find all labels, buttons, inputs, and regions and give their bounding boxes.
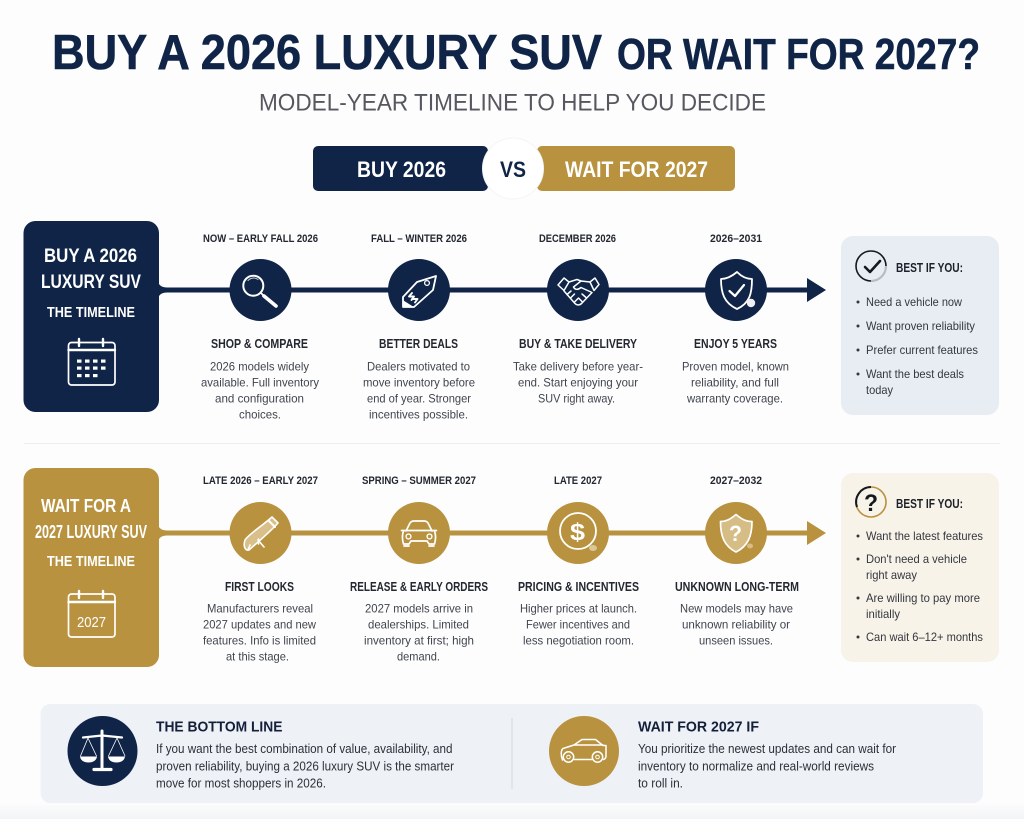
step: release and early orders: demand. bbox=[397, 650, 440, 664]
vs badge bbox=[482, 138, 544, 199]
arrow: buy timeline bbox=[160, 278, 826, 302]
step: pricing and incentives bbox=[518, 475, 639, 648]
versus banner bbox=[313, 138, 735, 199]
step: unknown long-term: New models may have bbox=[680, 602, 793, 616]
panel: buy timeline header: LUXURY SUV bbox=[41, 272, 141, 293]
step: first looks: features. Info is limited bbox=[203, 634, 316, 648]
step: release and early orders bbox=[350, 475, 488, 664]
subtitle: MODEL-YEAR TIMELINE TO HELP YOU DECIDE bbox=[259, 90, 766, 116]
step: shop and compare: available. Full inventory bbox=[201, 376, 319, 390]
step: enjoy 5 years: 2026–2031 bbox=[710, 233, 762, 245]
step: shop and compare: and configuration bbox=[215, 392, 304, 406]
panel: best if you buy bbox=[841, 236, 999, 415]
step: shop and compare: 2026 models widely bbox=[210, 360, 309, 374]
step: release and early orders: 2027 models arrive in bbox=[365, 602, 473, 616]
panel: best if you wait: Want the latest features bbox=[866, 529, 983, 543]
panel: best if you wait: right away bbox=[866, 568, 917, 582]
panel: best if you wait: initially bbox=[866, 607, 900, 621]
step: first looks: LATE 2026 – EARLY 2027 bbox=[203, 475, 318, 487]
icon: calendar bbox=[68, 339, 115, 385]
step: release and early orders: SPRING – SUMMER 2027 bbox=[362, 475, 476, 487]
text: the bottom line bbox=[156, 718, 455, 790]
panel: wait timeline header: 2027 LUXURY SUV bbox=[35, 522, 147, 542]
text: wait for 2027 if bbox=[638, 718, 897, 790]
step: pricing and incentives: Fewer incentives and bbox=[526, 618, 630, 632]
icon: check badge bbox=[856, 251, 886, 281]
arrow: wait timeline bbox=[160, 521, 826, 545]
step: buy and take delivery bbox=[513, 233, 643, 406]
step: first looks: at this stage. bbox=[226, 650, 289, 664]
text: the bottom line: move for most shoppers in 2026. bbox=[156, 776, 326, 790]
icon: calendar 2027: 2027 bbox=[77, 614, 106, 631]
step: enjoy 5 years: reliability, and full bbox=[691, 376, 779, 390]
step: pricing and incentives: less negotiation room. bbox=[523, 634, 634, 648]
step: buy and take delivery: DECEMBER 2026 bbox=[539, 233, 616, 245]
icon: shield question: ? bbox=[729, 521, 742, 546]
icon: dollar coin bbox=[547, 502, 609, 564]
step: better deals: end of year. Stronger bbox=[367, 392, 471, 406]
icon: telescope bbox=[230, 502, 292, 564]
step: first looks: Manufacturers reveal bbox=[207, 602, 313, 616]
step: enjoy 5 years: warranty coverage. bbox=[686, 392, 783, 406]
icon: magnifier bbox=[230, 259, 292, 321]
step: buy and take delivery: SUV right away. bbox=[538, 392, 615, 406]
panel: buy timeline header: BUY A 2026 bbox=[44, 246, 137, 267]
step: shop and compare: NOW – EARLY FALL 2026 bbox=[203, 233, 318, 245]
text: the bottom line: proven reliability, buying a 2026 luxury SUV is the smarter bbox=[156, 758, 455, 774]
step: buy and take delivery: BUY & TAKE DELIVERY bbox=[519, 337, 638, 351]
step: better deals: move inventory before bbox=[363, 376, 475, 390]
step: better deals: FALL – WINTER 2026 bbox=[371, 233, 467, 245]
icon: price tag bbox=[388, 259, 450, 321]
step: release and early orders: inventory at first; high bbox=[364, 634, 474, 648]
panel: bottom line bbox=[40, 704, 983, 803]
text: the bottom line: THE BOTTOM LINE bbox=[156, 718, 282, 736]
pill: wait for 2027: WAIT FOR 2027 bbox=[565, 157, 708, 182]
text: wait for 2027 if: inventory to normalize and real-world reviews bbox=[638, 758, 874, 774]
vs badge: VS bbox=[500, 157, 526, 182]
icon: handshake bbox=[547, 259, 609, 321]
step: shop and compare: SHOP & COMPARE bbox=[211, 337, 308, 351]
step: better deals bbox=[363, 233, 475, 422]
icon: shield question bbox=[705, 502, 767, 564]
step: better deals: BETTER DEALS bbox=[379, 337, 458, 351]
step: release and early orders: RELEASE & EARLY ORDERS bbox=[350, 580, 488, 594]
panel: best if you buy: Prefer current features bbox=[866, 343, 978, 357]
step: pricing and incentives: LATE 2027 bbox=[554, 475, 602, 487]
step: unknown long-term: UNKNOWN LONG-TERM bbox=[675, 580, 799, 594]
panel: best if you buy: today bbox=[866, 383, 893, 397]
panel: best if you buy: Want the best deals bbox=[866, 367, 964, 381]
step: unknown long-term: 2027–2032 bbox=[710, 475, 762, 487]
text: wait for 2027 if: to roll in. bbox=[638, 776, 683, 790]
step: better deals: incentives possible. bbox=[369, 408, 468, 422]
panel: wait timeline header bbox=[24, 468, 167, 667]
pill: wait for 2027 bbox=[537, 146, 735, 191]
pill: buy 2026 bbox=[313, 146, 488, 191]
title bbox=[52, 25, 980, 80]
step: pricing and incentives: PRICING & INCENTIVES bbox=[518, 580, 639, 594]
icon: calendar 2027 bbox=[68, 591, 115, 637]
panel: best if you wait: Can wait 6–12+ months bbox=[866, 630, 983, 644]
step: pricing and incentives: Higher prices at launch. bbox=[520, 602, 637, 616]
panel: best if you wait bbox=[841, 473, 999, 662]
panel: best if you wait: BEST IF YOU: bbox=[896, 496, 963, 511]
text: the bottom line: If you want the best combination of value, availability, and bbox=[156, 741, 452, 756]
title: BUY A 2026 LUXURY SUV bbox=[52, 25, 602, 80]
panel: wait timeline header: THE TIMELINE bbox=[47, 553, 135, 570]
step: first looks: FIRST LOOKS bbox=[225, 580, 294, 594]
step: enjoy 5 years: ENJOY 5 YEARS bbox=[694, 337, 777, 351]
icon: dollar coin: $ bbox=[570, 519, 586, 546]
pill: buy 2026: BUY 2026 bbox=[357, 157, 446, 182]
icon: shield check bbox=[705, 259, 767, 321]
text: wait for 2027 if: WAIT FOR 2027 IF bbox=[638, 718, 759, 736]
step: buy and take delivery: end. Start enjoying your bbox=[518, 376, 638, 390]
step: unknown long-term: unknown reliability or bbox=[682, 618, 790, 632]
step: enjoy 5 years: Proven model, known bbox=[682, 360, 789, 374]
panel: buy timeline header: THE TIMELINE bbox=[47, 304, 135, 321]
step: buy and take delivery: Take delivery before year- bbox=[513, 360, 643, 374]
step: shop and compare bbox=[201, 233, 319, 422]
step: unknown long-term: unseen issues. bbox=[699, 634, 773, 648]
step: enjoy 5 years bbox=[682, 233, 789, 406]
panel: best if you buy: Need a vehicle now bbox=[866, 295, 962, 309]
panel: best if you wait: Are willing to pay more bbox=[866, 591, 980, 605]
panel: best if you buy: Want proven reliability bbox=[866, 319, 975, 333]
icon: car front bbox=[388, 502, 450, 564]
step: better deals: Dealers motivated to bbox=[367, 360, 470, 374]
step: release and early orders: dealerships. Limited bbox=[368, 618, 469, 632]
icon: car side bbox=[549, 716, 619, 786]
step: shop and compare: choices. bbox=[239, 408, 281, 422]
icon: scales bbox=[68, 716, 138, 786]
step: first looks bbox=[203, 475, 318, 664]
text: wait for 2027 if: You prioritize the newest updates and can wait for bbox=[638, 741, 897, 756]
step: first looks: 2027 updates and new bbox=[203, 618, 316, 632]
step: unknown long-term bbox=[675, 475, 799, 648]
panel: best if you buy: BEST IF YOU: bbox=[896, 260, 963, 275]
icon: question badge bbox=[856, 487, 886, 517]
panel: best if you wait: Don't need a vehicle bbox=[866, 552, 967, 566]
panel: wait timeline header: WAIT FOR A bbox=[41, 495, 131, 516]
icon: question badge: ? bbox=[864, 490, 878, 517]
panel: buy timeline header bbox=[24, 221, 167, 412]
